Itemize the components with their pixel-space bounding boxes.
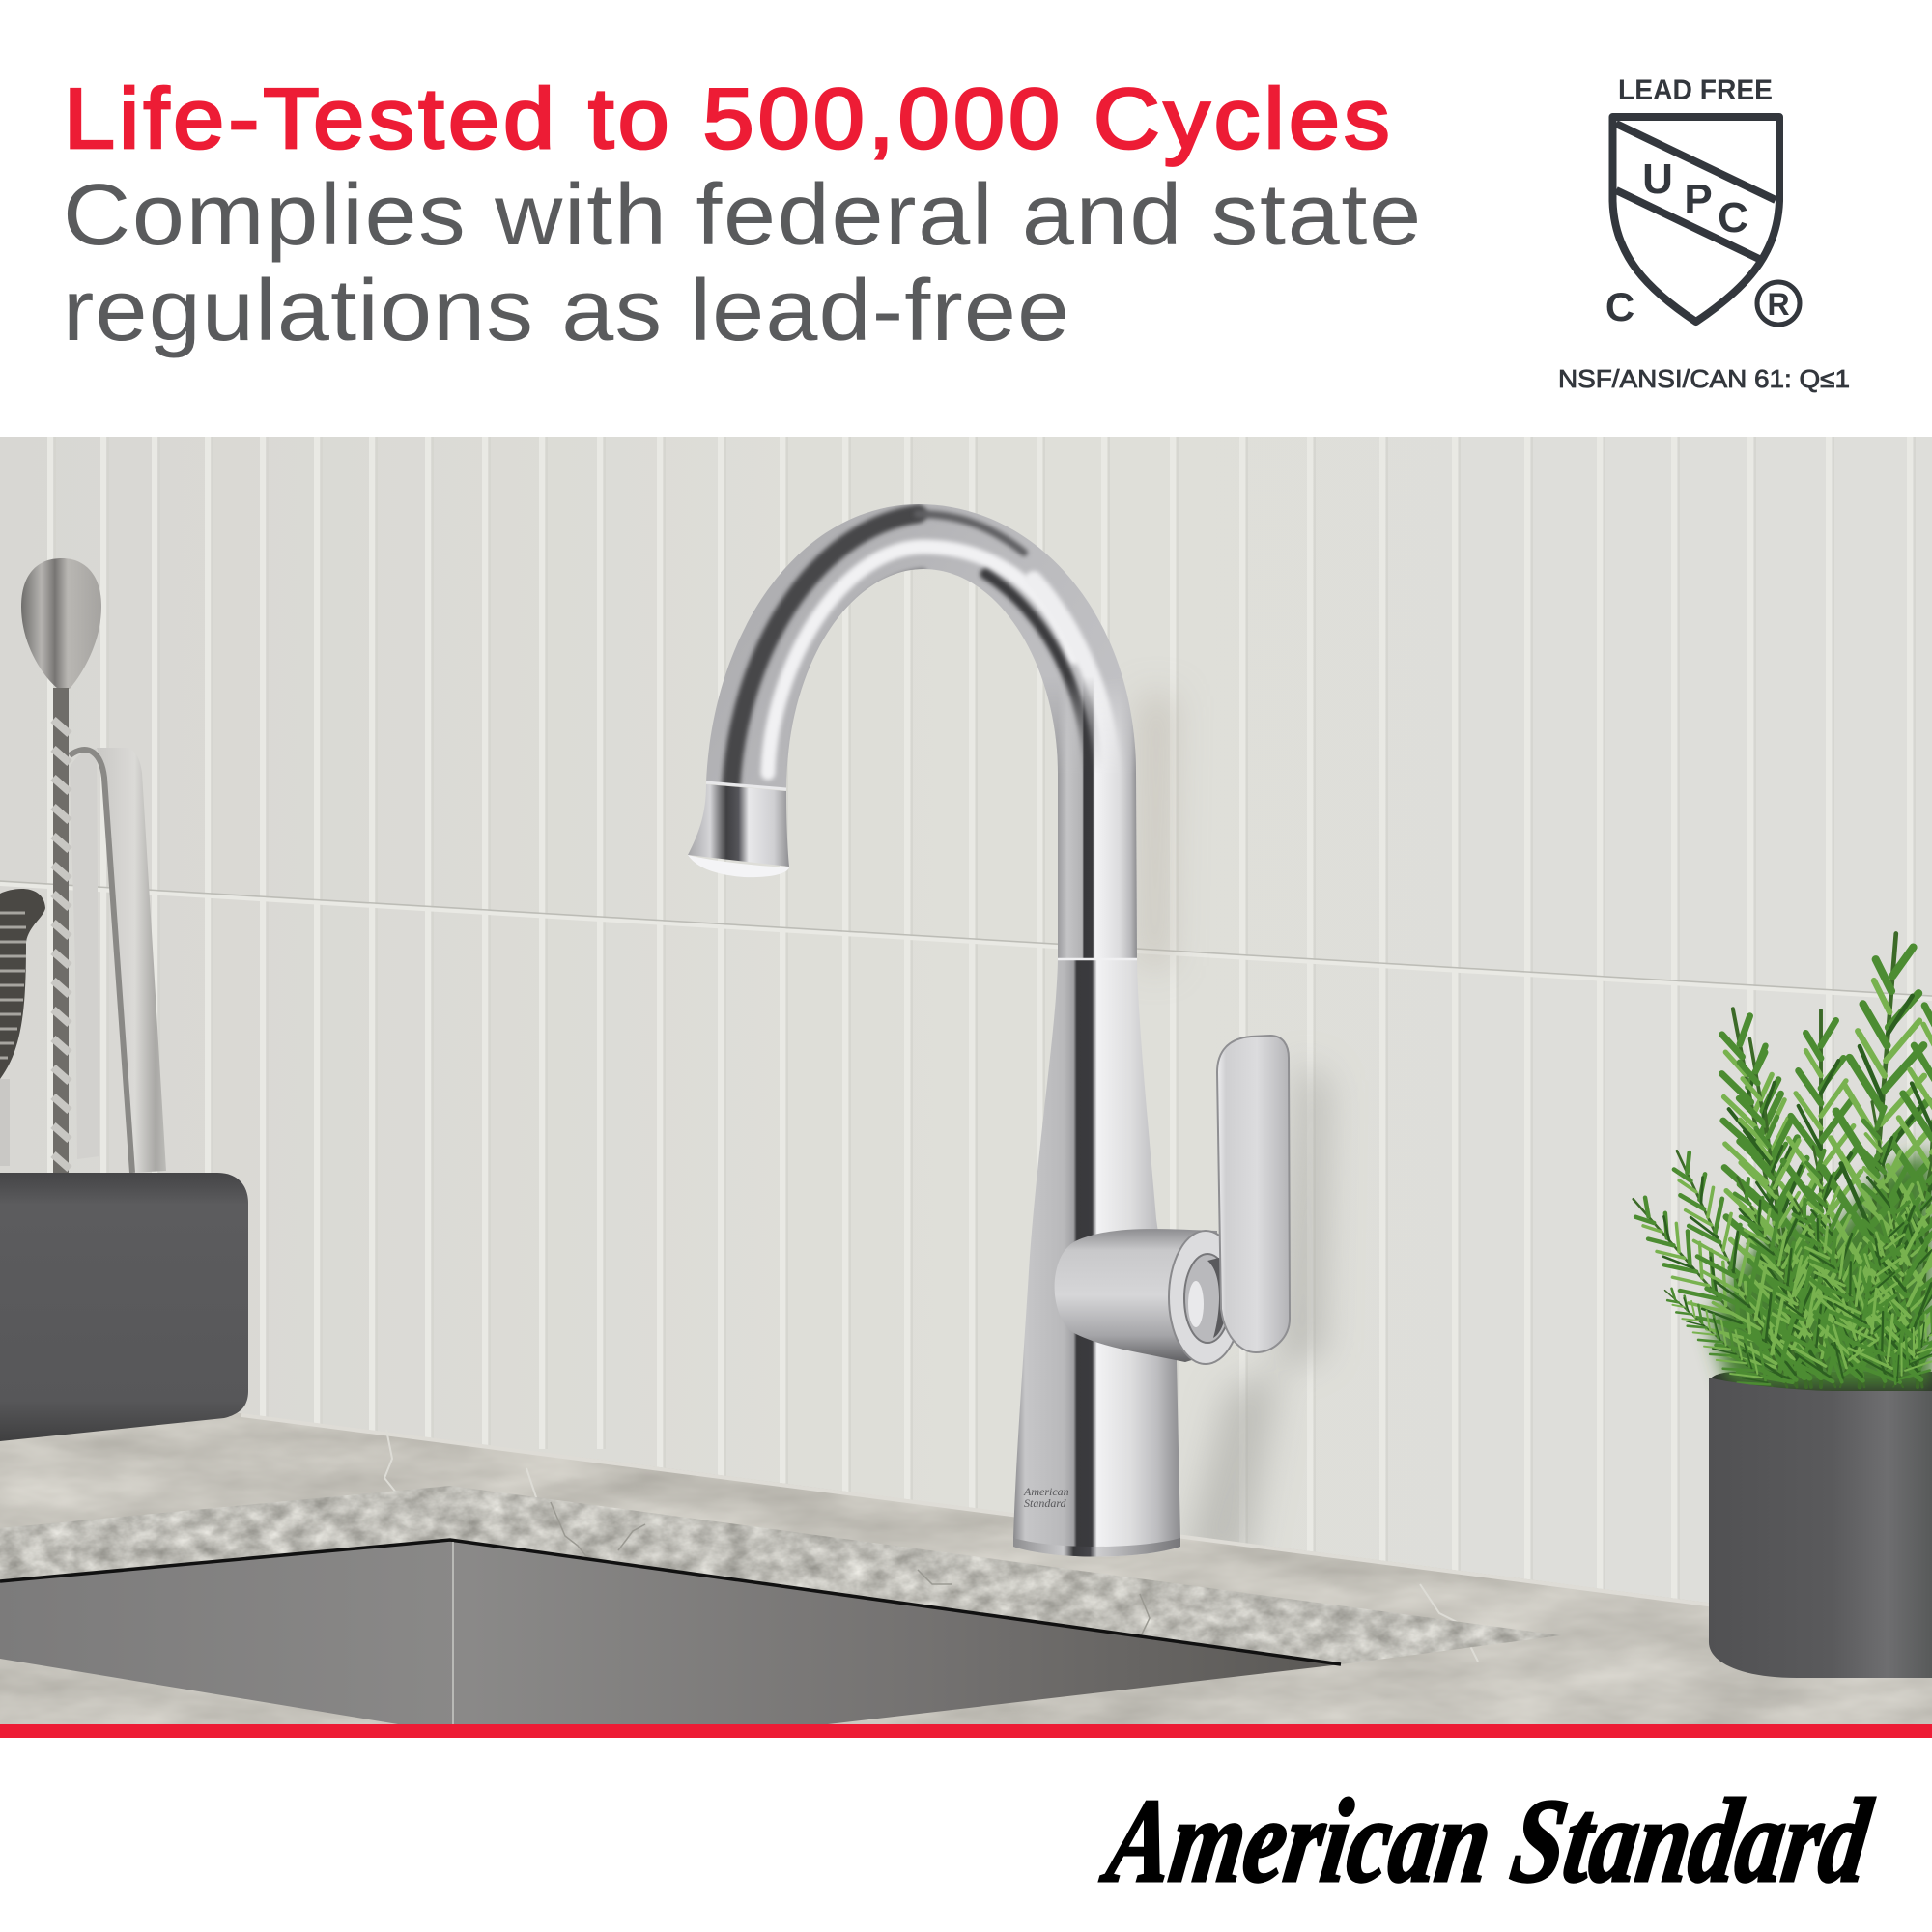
faucet spout arc xyxy=(706,504,1150,789)
faucet logo mark: Standard xyxy=(1024,1496,1067,1510)
counter front edge xyxy=(0,1486,1561,1664)
tiled wall xyxy=(0,437,1932,1654)
headline xyxy=(63,71,1421,358)
icon: UPC shield xyxy=(1613,117,1779,322)
shield letter P: P xyxy=(1684,176,1713,223)
counter back edge highlight xyxy=(242,1413,1709,1606)
plant foliage xyxy=(1606,928,1932,1410)
icon: registered mark xyxy=(1757,282,1800,325)
subtitle line 2: regulations as lead-free xyxy=(63,261,1069,358)
subtitle line 1: Complies with federal and state xyxy=(63,165,1421,263)
faucet body xyxy=(1013,773,1180,1557)
icon: bar spoon xyxy=(21,558,101,1177)
countertop surface xyxy=(0,1412,1932,1724)
counter edge veins xyxy=(551,1502,1150,1642)
faucet handle lever xyxy=(1217,1036,1290,1352)
counter surface veins xyxy=(384,1430,1478,1662)
potted plant xyxy=(1606,928,1932,1678)
shield letter U: U xyxy=(1642,156,1673,203)
certification standard text: NSF/ANSI/CAN 61: Q≤1 xyxy=(1558,364,1850,393)
tool holder block xyxy=(0,1173,248,1441)
faucet logo mark xyxy=(1023,1485,1069,1510)
icon: registered mark: R xyxy=(1767,287,1790,322)
icon: cocktail strainer xyxy=(0,889,45,1166)
certification badge xyxy=(1558,74,1850,393)
faucet wall shadow xyxy=(1140,696,1328,1565)
photo: kitchen scene xyxy=(0,437,1932,1739)
faucet nozzle xyxy=(688,782,789,877)
faucet logo mark: American xyxy=(1023,1485,1069,1498)
icon: tongs xyxy=(70,748,166,1173)
shield letter C: C xyxy=(1718,194,1748,242)
title: Life-Tested to 500,000 Cycles xyxy=(64,71,1390,166)
badge label: lead free: LEAD FREE xyxy=(1618,74,1773,106)
bar tools xyxy=(0,558,248,1441)
faucet xyxy=(688,504,1290,1557)
plant pot xyxy=(1709,1378,1932,1678)
plant pot interior xyxy=(1709,1372,1932,1396)
outer letter C: C xyxy=(1605,284,1634,329)
red divider bar xyxy=(0,1724,1932,1738)
sink basin xyxy=(0,1540,1341,1724)
faucet handle hub xyxy=(1055,1229,1242,1364)
